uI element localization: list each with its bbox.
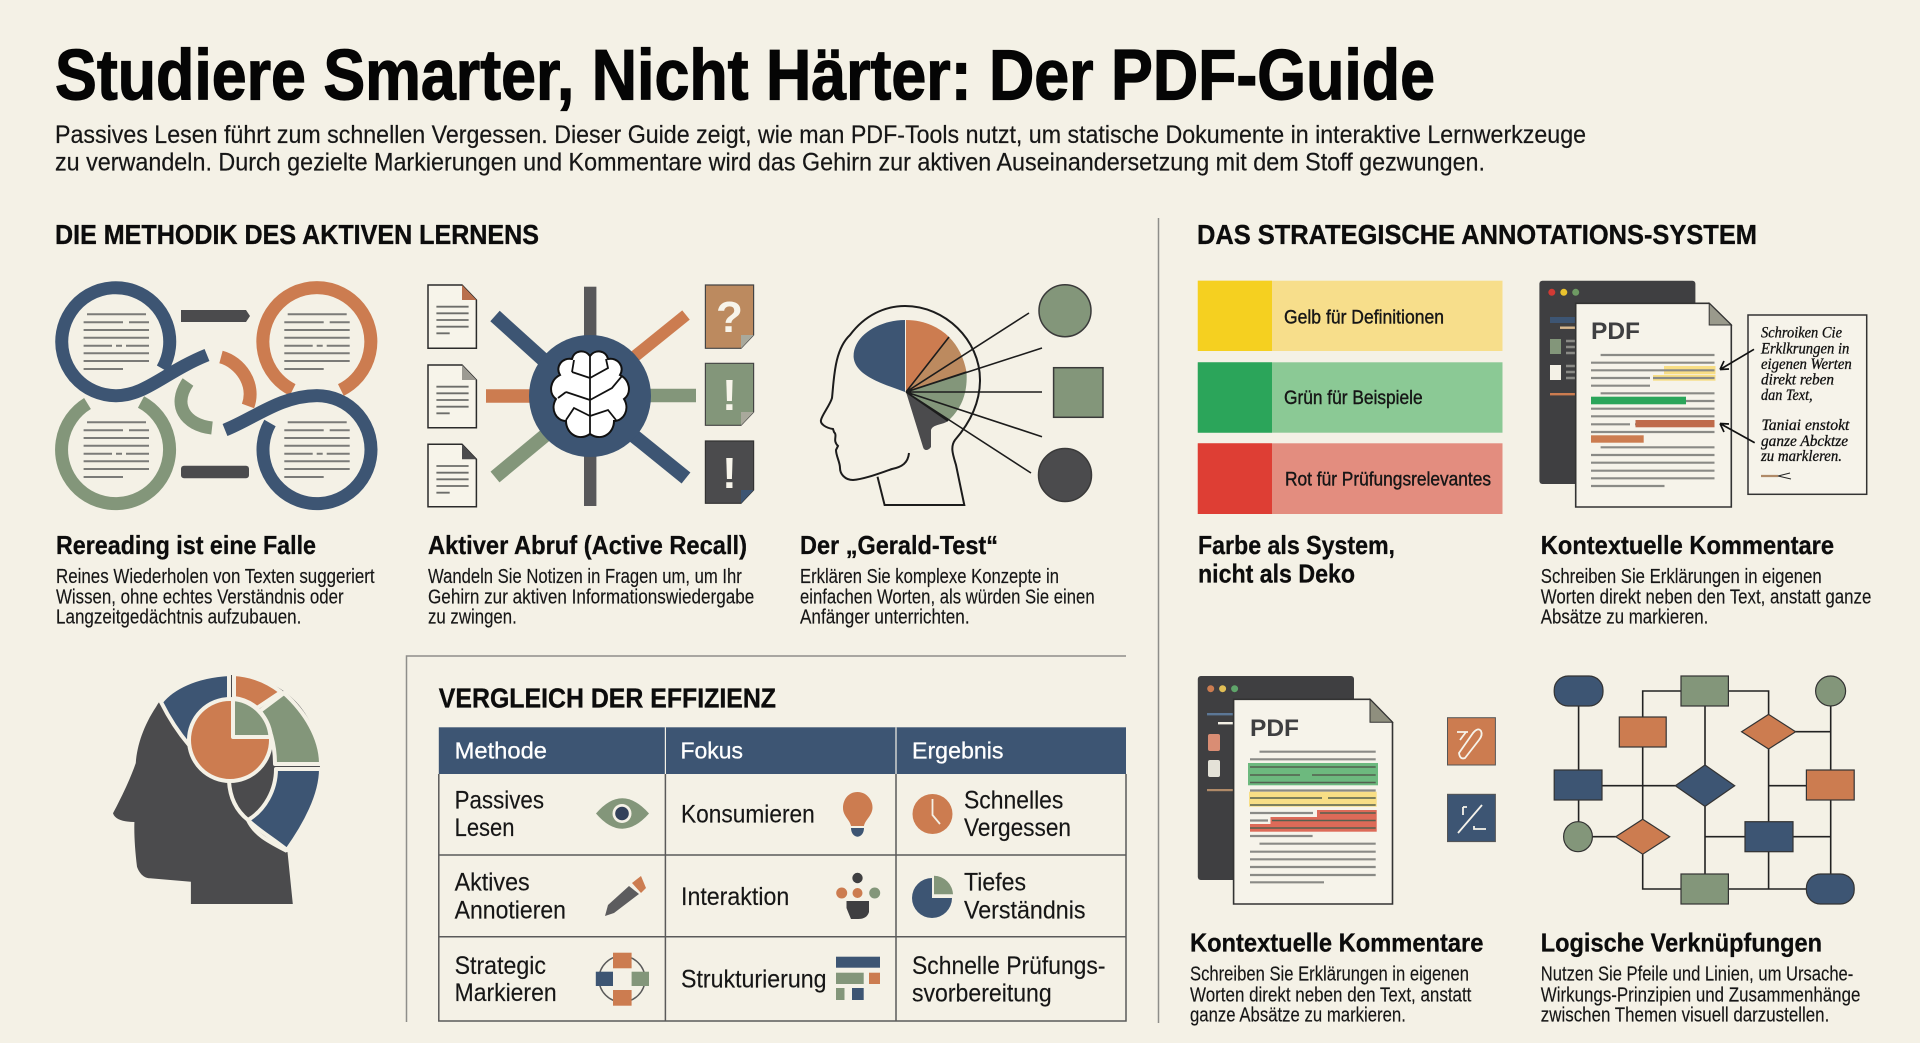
- icon: pdf window with note: zu markleren.: [1760, 448, 1842, 465]
- row: aktives annotieren: Tiefes: [964, 869, 1026, 897]
- icon: pdf window with note: dan Text,: [1761, 387, 1813, 404]
- icon: head with pie: [821, 306, 1042, 505]
- title: Studiere Smarter, Nicht Härter: Der PDF-Guide: [55, 36, 1435, 116]
- description: Wirkungs-Prinzipien und Zusammenhänge: [1541, 983, 1860, 1006]
- row: aktives annotieren: Aktives: [455, 869, 530, 897]
- icon: pdf window with note: eigenen Werten: [1761, 356, 1852, 373]
- shapes: [1038, 285, 1103, 502]
- icon: pdf window with note: Erklkrungen in: [1760, 340, 1850, 357]
- heading: Logische Verknüpfungen: [1541, 928, 1822, 958]
- row: strategic markieren: [455, 952, 1106, 1008]
- icon: pdf with highlights: PDF: [1250, 715, 1299, 742]
- color bar: green: Grün für Beispiele: [1284, 387, 1423, 409]
- heading: nicht als Deko: [1198, 559, 1355, 589]
- icon: pdf window with note: direkt reben: [1761, 371, 1834, 388]
- description: zwischen Themen visuell darzustellen.: [1541, 1004, 1829, 1027]
- description: Schreiben Sie Erklärungen in eigenen: [1190, 963, 1469, 986]
- panel: comparison: [406, 656, 1126, 1022]
- table header: Ergebnis: [912, 737, 1004, 763]
- description: ganze Absätze zu markieren.: [1190, 1004, 1406, 1027]
- heading: VERGLEICH DER EFFIZIENZ: [439, 682, 776, 713]
- icon: reading loop: [62, 288, 371, 504]
- cards: question and exclamation: !: [722, 371, 737, 420]
- table header: Methode: [455, 737, 547, 763]
- heading: Aktiver Abruf (Active Recall): [428, 530, 747, 560]
- intro text: Passives Lesen führt zum schnellen Vergessen. Dieser Guide zeigt, wie man PDF-Tools nutzt, um statische Dokumente in interaktive Lernwerkzeuge: [55, 121, 1586, 149]
- icon: brain hub: [486, 287, 696, 506]
- row: passives lesen: Vergessen: [964, 814, 1071, 842]
- row: strategic markieren: svorbereitung: [912, 980, 1052, 1008]
- description: Erklären Sie komplexe Konzepte in: [800, 565, 1059, 588]
- panel: contextual comments bottom: [1190, 676, 1495, 1027]
- icon: pdf window with note: Taniai enstokt: [1762, 417, 1850, 434]
- description: Nutzen Sie Pfeile und Linien, um Ursache-: [1541, 963, 1853, 986]
- description: Wissen, ohne echtes Verständnis oder: [56, 585, 344, 608]
- heading: Kontextuelle Kommentare: [1190, 928, 1483, 958]
- heading: Der „Gerald-Test“: [800, 530, 998, 560]
- panel: color system: [1198, 281, 1502, 589]
- row: aktives annotieren: Interaktion: [681, 883, 789, 911]
- heading: methodik: DIE METHODIK DES AKTIVEN LERNENS: [55, 219, 539, 250]
- table header: Fokus: [680, 737, 743, 763]
- row: strategic markieren: Strukturierung: [681, 965, 826, 993]
- description: [428, 565, 754, 628]
- table header: [439, 727, 1126, 774]
- cards: question and exclamation: !: [722, 449, 737, 498]
- row: aktives annotieren: Verständnis: [964, 896, 1086, 924]
- description: [56, 565, 375, 628]
- description: [800, 565, 1095, 628]
- color bar: yellow: [1198, 281, 1502, 351]
- intro text: [55, 121, 1586, 176]
- description: einfachen Worten, als würden Sie einen: [800, 585, 1095, 608]
- row: strategic markieren: Schnelle Prüfungs-: [912, 952, 1106, 980]
- intro text: zu verwandeln. Durch gezielte Markierungen und Kommentare wird das Gehirn zur aktiven Auseinandersetzung mit dem Stoff gezwungen.: [55, 148, 1485, 176]
- color bar: yellow: Gelb für Definitionen: [1284, 306, 1444, 328]
- description: zu zwingen.: [428, 605, 517, 628]
- panel: rereading: [56, 288, 375, 628]
- row: passives lesen: [455, 787, 1071, 842]
- description: Reines Wiederholen von Texten suggeriert: [56, 565, 375, 588]
- row: strategic markieren: Strategic: [455, 952, 546, 980]
- row: strategic markieren: Markieren: [455, 979, 557, 1007]
- heading: [1198, 530, 1395, 589]
- cards: question and exclamation: ?: [716, 293, 743, 342]
- cards: question and exclamation: [705, 285, 754, 503]
- panel: active recall: [428, 285, 754, 628]
- description: Wandeln Sie Notizen in Fragen um, um Ihr: [428, 565, 742, 588]
- heading: Rereading ist eine Falle: [56, 530, 316, 560]
- panel frame: [406, 656, 1126, 1022]
- icon: pdf window with note: PDF: [1591, 318, 1640, 345]
- documents: [428, 285, 476, 507]
- description: [1190, 963, 1472, 1027]
- panel: contextual comments top: [1539, 281, 1871, 628]
- icon: head with segments: [113, 674, 321, 904]
- color bar: red: Rot für Prüfungsrelevantes: [1285, 469, 1491, 491]
- row: passives lesen: Konsumieren: [681, 801, 815, 829]
- icon: pdf window with note: Schroiken Cie: [1761, 324, 1842, 341]
- icon: pdf window with note: ganze Abcktze: [1761, 433, 1848, 450]
- row: passives lesen: Passives: [455, 787, 544, 815]
- row: aktives annotieren: [455, 869, 1086, 924]
- panel: gerald test: [800, 285, 1103, 628]
- description: Langzeitgedächtnis aufzubauen.: [56, 605, 301, 628]
- description: [1541, 565, 1871, 628]
- table: [439, 727, 1126, 1021]
- panel: logical links: [1541, 676, 1860, 1027]
- row: passives lesen: Lesen: [455, 814, 514, 842]
- description: [1541, 963, 1860, 1027]
- description: Schreiben Sie Erklärungen in eigenen: [1541, 565, 1822, 588]
- color bar: red: [1198, 443, 1502, 514]
- heading: Farbe als System,: [1198, 530, 1395, 560]
- heading: Kontextuelle Kommentare: [1541, 530, 1834, 560]
- icon: pdf with highlights: [1198, 676, 1392, 904]
- description: Absätze zu markieren.: [1541, 605, 1708, 628]
- row: aktives annotieren: Annotieren: [455, 896, 566, 924]
- color bar: green: [1198, 362, 1502, 433]
- row: passives lesen: Schnelles: [964, 787, 1063, 815]
- description: Anfänger unterrichten.: [800, 605, 970, 628]
- icon: orange pen tile: [1448, 718, 1495, 765]
- flowchart: [1554, 676, 1854, 904]
- description: Worten direkt neben den Text, anstatt: [1190, 983, 1472, 1006]
- column divider: [1158, 218, 1160, 1023]
- icon: navy math tile: [1448, 794, 1495, 842]
- description: Gehirn zur aktiven Informationswiedergabe: [428, 585, 754, 608]
- icon: pdf window with note: [1539, 281, 1867, 507]
- heading: annotations-system: DAS STRATEGISCHE ANNOTATIONS-SYSTEM: [1197, 219, 1757, 250]
